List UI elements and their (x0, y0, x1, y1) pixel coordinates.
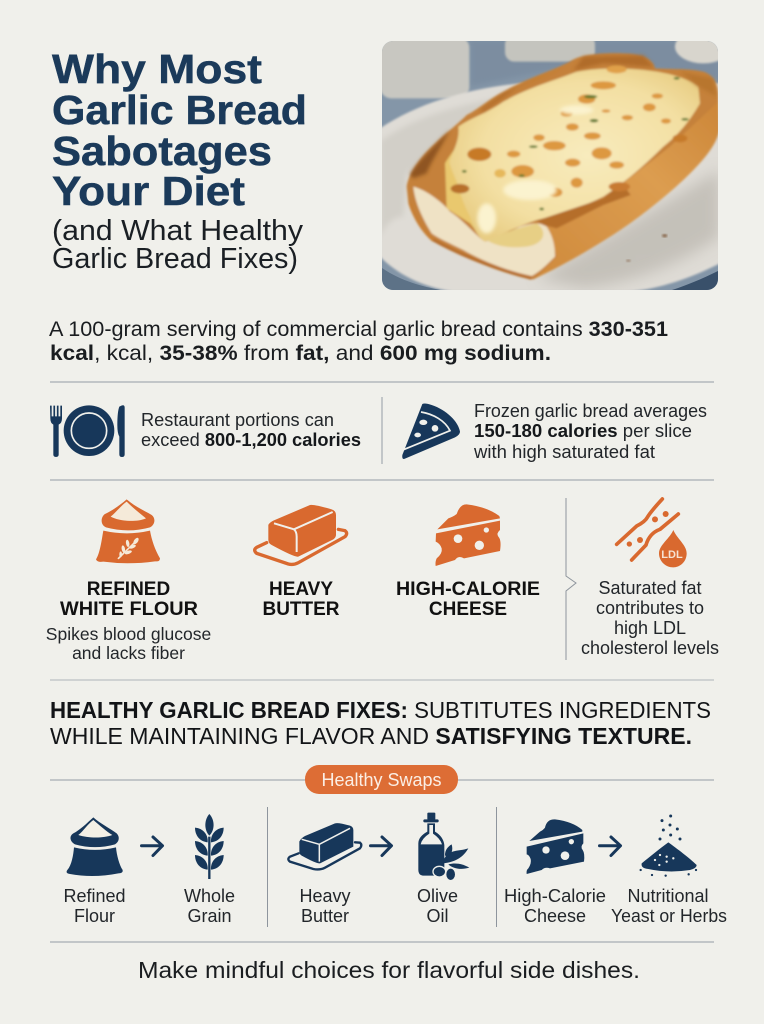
cheese heading: CHEESE (429, 599, 507, 620)
subtitle (52, 215, 304, 275)
panel: heavy butter (255, 505, 347, 620)
cheese label: High-Calorie (504, 886, 606, 906)
intro text: A 100-gram serving of commercial garlic bread contains 330-351 (49, 317, 668, 341)
frozen text: Frozen garlic bread averages (474, 400, 707, 421)
section heading: healthy fixes: HEALTHY GARLIC BREAD FIXES: SUBTITUTES INGREDIENTS (50, 697, 711, 723)
icon: wheat (195, 814, 224, 879)
title: Garlic Bread (52, 87, 307, 133)
oil label (417, 886, 458, 926)
arrow (142, 837, 162, 856)
panel: refined white flour (46, 499, 211, 663)
yeast label: Nutritional (627, 886, 709, 906)
flour label: Flour (74, 906, 115, 926)
photo: garlic bread on plate (380, 30, 732, 293)
flour heading: WHITE FLOUR (60, 599, 198, 620)
saturated fat text: contributes to (596, 598, 704, 618)
arrow (370, 837, 392, 856)
arrow (600, 837, 620, 856)
title: Why Most (52, 46, 262, 92)
flour description: Spikes blood glucose (46, 624, 211, 644)
icon: butter on dish (255, 505, 347, 564)
restaurant text (141, 409, 361, 450)
intro text: kcal, kcal, 35-38% from fat, and 600 mg sodium. (50, 341, 551, 365)
swap: cheese to yeast (504, 814, 727, 926)
flour label (63, 886, 126, 926)
subtitle: Garlic Bread Fixes) (52, 243, 298, 275)
butter label: Heavy (299, 886, 351, 906)
title: Your Diet (52, 168, 245, 214)
icon: cheese wedge (435, 504, 501, 566)
swap: butter to olive oil (288, 813, 469, 926)
icon: olive oil bottle (418, 813, 469, 881)
panel: high-calorie cheese (396, 504, 540, 620)
divider with chevron (566, 498, 576, 660)
icon: yeast and herbs pile (639, 814, 697, 877)
frozen text: with high saturated fat (473, 441, 655, 462)
badge: healthy swaps: Healthy Swaps (321, 770, 442, 790)
cheese heading: HIGH-CALORIE (396, 579, 540, 600)
panel: restaurant portions (50, 405, 361, 457)
grain label: Whole (184, 886, 235, 906)
butter heading: HEAVY (269, 579, 333, 600)
intro text (49, 317, 668, 365)
saturated fat text (581, 578, 719, 658)
frozen text: 150-180 calories per slice (474, 420, 692, 441)
text: LDL in drop: LDL (661, 549, 683, 561)
icon: dark flour sack (67, 817, 123, 876)
butter label: Butter (301, 906, 349, 926)
icon: artery with LDL drop (617, 499, 687, 567)
icon: dark butter (288, 823, 361, 869)
yeast label: Yeast or Herbs (611, 906, 727, 926)
swap: flour to grain (63, 814, 235, 926)
title (52, 46, 307, 214)
butter heading: BUTTER (262, 599, 340, 620)
title: Sabotages (52, 128, 272, 174)
flour description (46, 624, 211, 663)
butter label (299, 886, 351, 926)
flour heading (60, 579, 198, 620)
cheese label (504, 886, 606, 926)
panel: frozen garlic bread (401, 400, 707, 462)
grain label (184, 886, 235, 926)
footer message: Make mindful choices for flavorful side dishes. (138, 957, 640, 983)
cheese label: Cheese (524, 906, 586, 926)
frozen text (473, 400, 707, 462)
subtitle: (and What Healthy (52, 215, 304, 247)
section heading: healthy fixes (50, 697, 711, 749)
flour description: and lacks fiber (72, 643, 185, 663)
section heading: healthy fixes: WHILE MAINTAINING FLAVOR AND SATISFYING TEXTURE. (50, 723, 692, 749)
saturated fat text: cholesterol levels (581, 638, 719, 658)
saturated fat text: high LDL (614, 618, 686, 638)
saturated fat text: Saturated fat (598, 578, 702, 598)
butter heading (262, 579, 340, 620)
flour heading: REFINED (87, 579, 170, 600)
icon: dark cheese (527, 819, 584, 874)
panel: saturated fat LDL (581, 499, 719, 658)
oil label: Olive (417, 886, 458, 906)
restaurant text: Restaurant portions can (141, 409, 334, 430)
badge: healthy swaps (305, 765, 458, 794)
grain label: Grain (187, 906, 232, 926)
icon: plate and cutlery (50, 405, 125, 457)
restaurant text: exceed 800-1,200 calories (141, 429, 361, 450)
cheese heading (396, 579, 540, 620)
yeast label (611, 886, 727, 926)
icon: pizza slice (401, 404, 460, 459)
icon: flour sack (96, 499, 160, 563)
flour label: Refined (63, 886, 126, 906)
oil label: Oil (426, 906, 448, 926)
